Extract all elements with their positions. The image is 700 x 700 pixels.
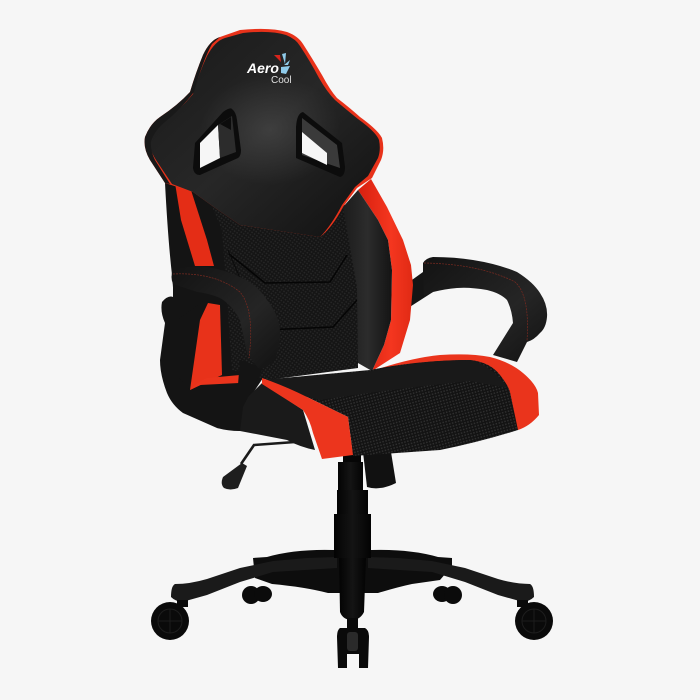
seat: red rear-right edge [372, 354, 539, 430]
base: adjustment lever [222, 442, 295, 490]
headrest strap slot: left [193, 108, 241, 175]
seat: upper leather panel [262, 360, 508, 400]
headrest section [145, 29, 383, 237]
base: rear casters [242, 586, 462, 604]
seat: left red strip [190, 375, 240, 390]
red side stripe: upper left [175, 183, 214, 266]
left arm frame [160, 284, 263, 431]
base: five-star frame [171, 550, 534, 620]
base: height adjustment knob [363, 452, 396, 488]
left inner red stripe [190, 303, 222, 390]
caster: right [515, 600, 553, 640]
seat: mesh cushion [262, 360, 518, 456]
headrest strap slot: right [296, 112, 345, 177]
right armrest [423, 257, 547, 362]
seat: red front strip [262, 378, 353, 459]
logo wordmark: Aero [246, 60, 279, 76]
seat [190, 354, 539, 459]
seat: left side panel [217, 383, 315, 450]
left armrest [172, 266, 280, 368]
logo: AeroCool [246, 53, 292, 86]
centre mesh backrest panel [205, 190, 358, 380]
caster: front [337, 618, 369, 668]
logo star icon [274, 53, 290, 74]
right armrest support [405, 272, 433, 310]
red side stripe: right [358, 179, 413, 371]
logo sub wordmark: Cool [271, 75, 292, 86]
right bolster [343, 190, 392, 371]
base: gas lift column [334, 452, 371, 558]
left outer backrest side and dark back fill [165, 183, 265, 405]
caster: left [151, 600, 189, 640]
